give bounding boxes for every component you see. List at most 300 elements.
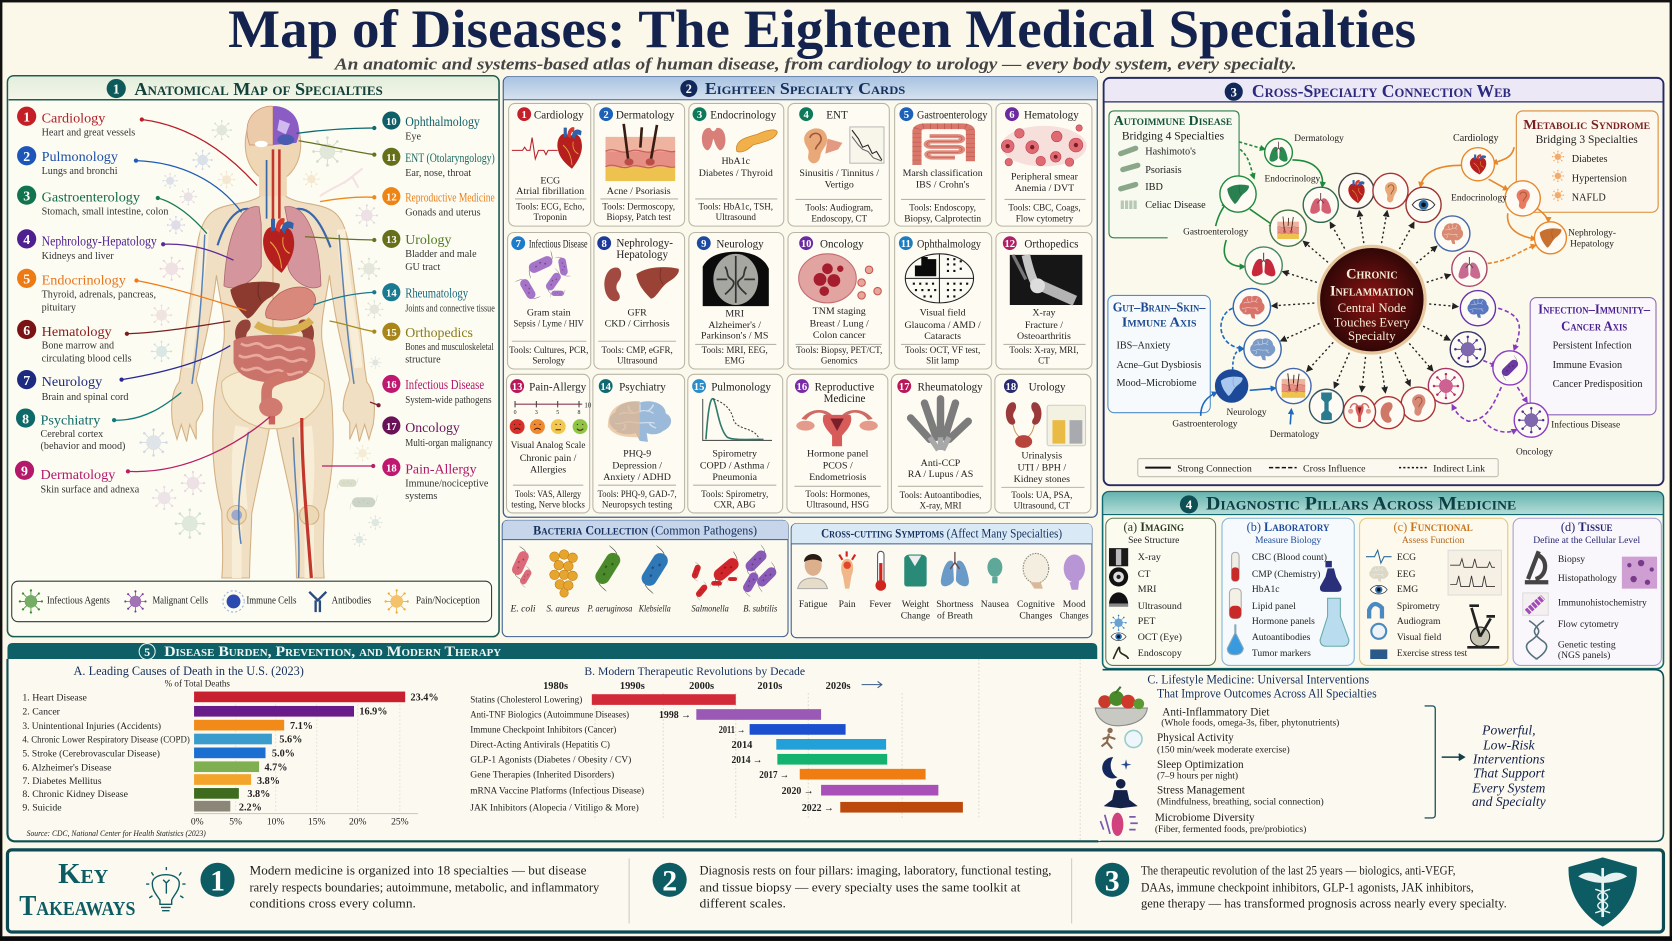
bacteria names: P. aeruginosa [587, 604, 633, 615]
specialty labels: left column: Dermatology [41, 467, 116, 483]
pillar: laboratory: Lipid panel [1252, 601, 1296, 612]
specialty labels: left column [15, 107, 168, 496]
card: Hematology: Anemia / DVT [1015, 183, 1074, 194]
pelvis and bones [222, 367, 324, 429]
specialty labels: right column: Pain-Allergy [405, 461, 477, 476]
card: Oncology [788, 232, 889, 369]
bacteria names [510, 604, 778, 615]
pillar: laboratory [1222, 518, 1354, 665]
gantt chart: therapeutic revolutions: mRNA Vaccine Platforms (Infectious Disease) [470, 785, 644, 795]
card: Reproductive Medicine: Medicine [824, 393, 866, 405]
pillar: laboratory: Tumor markers [1252, 648, 1311, 659]
bar chart: leading causes of death: 5.0% [272, 749, 295, 760]
card: Neurology: Parkinson's / MS [701, 331, 768, 342]
bar chart: leading causes of death: 3.8% [247, 789, 270, 800]
card: Reproductive Medicine: Endometriosis [809, 472, 866, 483]
heading: key takeaways: Takeaways [19, 890, 135, 922]
card: Neurology: Alzheimer's / [708, 320, 761, 331]
takeaway 3 [1095, 862, 1507, 910]
bacteria names: Klebsiella [638, 604, 671, 615]
cluster arrows: purple [1452, 308, 1527, 432]
pillar: tissue: Define at the Cellular Level [1533, 535, 1640, 546]
symptom icons [798, 551, 1085, 591]
web labels: Oncology [1516, 447, 1553, 457]
panel: cross-cutting symptoms [791, 524, 1092, 638]
bacteria names: E. coli [510, 604, 536, 615]
gantt chart: therapeutic revolutions: Direct-Acting Antivirals (Hepatitis C) [470, 740, 610, 750]
card: Pain-Allergy: 10 [584, 402, 592, 409]
web labels: Endocrinology [1265, 174, 1321, 184]
ring of specialty nodes [1216, 139, 1566, 437]
card: Reproductive Medicine: Hormone panel [807, 448, 869, 459]
card: Pulmonology: Spirometry [712, 448, 757, 459]
card: Nephrology-Hepatology: Ultrasound [617, 356, 658, 366]
gantt chart: therapeutic revolutions: B. Modern Therapeutic Revolutions by Decade [584, 665, 805, 678]
pillar: imaging: OCT (Eye) [1138, 632, 1182, 643]
callout: infection-immunity-cancer axis [1530, 298, 1656, 415]
gantt chart: therapeutic revolutions: 2020 → [782, 786, 814, 797]
takeaway 2: Diagnosis rests on four pillars: imaging, laboratory, functional testing, [700, 862, 1051, 877]
specialty labels: right column: systems [405, 491, 437, 502]
card: Cardiology: Atrial fibrillation [516, 186, 584, 197]
conclusion: low-risk interventions: Interventions [1472, 752, 1545, 767]
gantt chart: therapeutic revolutions: 2014 [732, 740, 753, 751]
web labels: Neurology [1226, 408, 1267, 418]
card: Pain-Allergy [507, 374, 592, 513]
specialty labels: left column: Cerebral cortex [41, 429, 103, 440]
card: Urology: Urology [1029, 381, 1066, 393]
symptom names: Changes [1060, 611, 1089, 622]
specialty labels: right column: 17 [386, 422, 397, 433]
specialty labels: right column: 12 [386, 193, 397, 204]
card: Pulmonology: CXR, ABG [714, 500, 756, 510]
card: Psychiatry: Depression / [612, 461, 662, 472]
card: Oncology: 10 [801, 239, 811, 250]
lifestyle interventions: (Mindfulness, breathing, social connection) [1157, 797, 1324, 808]
card: Psychiatry: Neuropsych testing [602, 500, 673, 510]
card: Pain-Allergy: 8 [578, 410, 581, 416]
pillar: tissue: Flow cytometry [1558, 619, 1619, 630]
lifestyle interventions: (7–9 hours per night) [1157, 770, 1238, 781]
callout: gut-brain-skin-immune axis: Acne–Gut Dysbiosis [1116, 360, 1201, 371]
card: Gastroenterology [895, 103, 992, 226]
card: Pain-Allergy: Visual Analog Scale [511, 440, 586, 451]
specialty labels: right column: 11 [386, 153, 396, 164]
bar chart: leading causes of death: 7.1% [290, 721, 313, 732]
card: Orthopedics: CT [1038, 356, 1050, 366]
callout: autoimmune disease: Autoimmune Disease [1114, 113, 1232, 128]
kidneys, pancreas [235, 319, 251, 348]
bar chart: leading causes of death: 16.9% [359, 706, 387, 717]
pillar: imaging: PET [1138, 616, 1155, 627]
symptom names: Change [901, 611, 930, 622]
card: Dermatology: Tools: Dermoscopy, [602, 202, 675, 212]
gantt chart: therapeutic revolutions: 2000s [689, 681, 714, 692]
card: ENT: 4 [803, 110, 809, 121]
card: Infectious Disease: 7 [516, 239, 522, 250]
card: Gastroenterology: Biopsy, Calprotectin [904, 213, 982, 223]
heading: connection web: Cross-Specialty Connection Web [1252, 81, 1511, 101]
card: Oncology: TNM staging [813, 306, 866, 317]
gantt chart: therapeutic revolutions: 2011 → [719, 725, 745, 736]
gantt chart: therapeutic revolutions: 2014 → [732, 755, 762, 766]
card: ENT: Endoscopy, CT [811, 213, 868, 223]
web labels: Endocrinology [1451, 194, 1507, 204]
panel 5: disease burden [7, 643, 1663, 841]
card: Neurology: EMG [725, 356, 745, 366]
legend: body map: Immune Cells [246, 596, 296, 607]
bacteria names: Salmonella [692, 604, 729, 615]
specialty labels: right column: Gonads and uterus [405, 207, 481, 218]
card: Neurology: Neurology [716, 238, 764, 250]
specialty labels: right column: Joints and connective tissue [405, 303, 495, 314]
subtitle: An anatomic and systems-based atlas of human disease, from cardiology to urology — every body system, every specialty. [334, 54, 1297, 73]
icon: microbiome [1100, 813, 1138, 836]
card: Hematology: Flow cytometry [1016, 213, 1074, 223]
card: Psychiatry: 14 [600, 382, 612, 393]
card: Infectious Disease: Sepsis / Lyme / HIV [514, 318, 585, 329]
callout: autoimmune disease [1109, 111, 1239, 238]
card: Cardiology: Troponin [534, 212, 567, 222]
pillar: imaging: X-ray [1138, 552, 1161, 563]
bar chart: leading causes of death: 3. Unintentional Injuries (Accidents) [22, 721, 161, 732]
specialty labels: right column: GU tract [405, 262, 441, 273]
takeaway 2: and tissue biopsy — every specialty uses the same toolkit at [700, 879, 1021, 894]
specialty labels: right column: Rheumatology [405, 286, 468, 301]
hub: chronic inflammation: Specialty [1348, 329, 1396, 343]
conclusion: low-risk interventions: Low-Risk [1482, 738, 1536, 753]
heading: connection web: 3 [1231, 86, 1237, 100]
card: Orthopedics: Osteoarthritis [1017, 331, 1071, 342]
card: Dermatology: Dermatology [616, 109, 675, 121]
lifestyle interventions [1155, 707, 1339, 835]
hub: chronic inflammation: Inflammation [1330, 283, 1414, 299]
card: Infectious Disease: Infectious Disease [529, 238, 588, 250]
legend: connection types [1138, 459, 1498, 477]
heading: disease burden: Disease Burden, Prevention, and Modern Therapy [164, 644, 502, 660]
heart organ [263, 218, 294, 273]
pillar: imaging: Endoscopy [1138, 648, 1182, 659]
gantt chart: therapeutic revolutions: 2022 → [802, 803, 834, 814]
takeaway 2: different scales. [700, 895, 786, 910]
title: Map of Diseases: The Eighteen Medical Specialties [228, 0, 1416, 59]
card: Rheumatology: X-ray, MRI [919, 501, 962, 511]
specialty labels: right column: Ophthalmology [405, 114, 480, 129]
specialty labels: left column: (behavior and mood) [41, 441, 125, 452]
lifestyle medicine: C. Lifestyle Medicine: Universal Interventions [1147, 673, 1369, 687]
specialty labels: right column: Urology [405, 232, 451, 247]
pillar: laboratory: CMP (Chemistry) [1252, 569, 1320, 580]
bar chart: leading causes of death: 20% [349, 816, 367, 827]
bar chart: leading causes of death: 4. Chronic Lower Respiratory Disease (COPD) [22, 735, 190, 746]
bar chart: leading causes of death: 5% [229, 816, 242, 827]
bar chart: leading causes of death: 4.7% [264, 762, 287, 773]
card: Infectious Disease: Tools: Cultures, PCR, [509, 345, 588, 355]
card: Rheumatology: 17 [899, 382, 910, 393]
specialty labels: left column: pituitary [42, 302, 77, 313]
panel 4: diagnostic pillars [1103, 492, 1663, 669]
card: Rheumatology [891, 374, 991, 513]
card: Rheumatology: Anti-CCP [921, 458, 961, 469]
card: Cardiology [509, 103, 591, 226]
callout: infection-immunity-cancer axis: Persistent Infection [1553, 341, 1632, 352]
card: Nephrology-Hepatology: Nephrology- [616, 237, 673, 249]
symptom names: Pain [839, 599, 856, 610]
pillar: laboratory: HbA1c [1252, 584, 1280, 595]
conclusion: low-risk interventions [1471, 723, 1547, 809]
web labels: Gastroenterology [1172, 420, 1238, 430]
specialty labels: left column: circulating blood cells [42, 354, 132, 365]
bacteria illustrations [506, 544, 783, 601]
card: Nephrology-Hepatology: CKD / Cirrhosis [605, 318, 670, 329]
card: Nephrology-Hepatology: 8 [602, 239, 607, 250]
heading: diagnostic pillars: 4 [1186, 498, 1193, 512]
specialty labels: left column: Hematology [42, 324, 113, 340]
pillar: functional [1360, 518, 1508, 665]
card: Psychiatry: Tools: PHQ-9, GAD-7, [598, 489, 677, 499]
card: Dermatology: Biopsy, Patch test [606, 212, 671, 222]
bar chart: leading causes of death: 15% [308, 816, 325, 827]
specialty labels: right column: Eye [405, 132, 421, 143]
card: Oncology: Colon cancer [813, 330, 866, 341]
liver, stomach [230, 282, 280, 318]
panel: cross-cutting symptoms: Cross-cutting Symptoms (Affect Many Specialties) [821, 526, 1062, 540]
symptom names: Weight [902, 599, 929, 610]
card: Gastroenterology: 5 [904, 110, 909, 121]
lifestyle interventions: (150 min/week moderate exercise) [1157, 744, 1290, 755]
pillar: functional: Visual field [1397, 632, 1441, 643]
spoke arrows [1272, 211, 1458, 392]
takeaway 2: 2 [662, 864, 677, 897]
gantt chart: therapeutic revolutions: Gene Therapies (Inherited Disorders) [470, 769, 614, 779]
card: Rheumatology: Rheumatology [917, 381, 983, 393]
pillar: imaging: (a) Imaging [1124, 520, 1184, 534]
specialty labels: right column: 10 [386, 117, 397, 128]
conclusion: low-risk interventions: and Specialty [1472, 794, 1547, 809]
card: Rheumatology: Tools: Autoantibodies, [900, 490, 981, 500]
gantt chart: therapeutic revolutions: JAK Inhibitors (Alopecia / Vitiligo & More) [470, 802, 639, 812]
icon: caduceus shield [1568, 857, 1637, 927]
panel 1: anatomical map [7, 76, 499, 637]
card: Ophthalmology: Visual field [920, 308, 966, 319]
card: Gastroenterology: Gastroenterology [917, 109, 988, 121]
specialty labels: right column: 18 [386, 463, 397, 474]
pillar: tissue: Genetic testing [1558, 639, 1616, 650]
icon: moon and star [1102, 757, 1131, 778]
card: Ophthalmology: Tools: OCT, VF test, [905, 345, 980, 355]
legend: connection types: Strong Connection [1177, 463, 1252, 474]
card: Dermatology [594, 103, 685, 226]
specialty labels: right column: Oncology [405, 420, 460, 435]
card: Pulmonology [688, 374, 783, 513]
bar chart: leading causes of death [22, 664, 439, 838]
gantt chart: therapeutic revolutions: GLP-1 Agonists (Diabetes / Obesity / CV) [470, 754, 631, 764]
card: Nephrology-Hepatology: GFR [627, 308, 647, 319]
card: Neurology: MRI [725, 309, 744, 320]
lifestyle interventions: (Whole foods, omega-3s, fiber, phytonutrients) [1161, 718, 1339, 729]
card: Hematology [996, 103, 1092, 226]
faint pathogens background [140, 120, 383, 547]
card: Hematology: Peripheral smear [1011, 172, 1079, 183]
pillar: functional: (c) Functional [1394, 520, 1473, 534]
card: Urology: 18 [1006, 382, 1016, 393]
specialty labels: left column: Heart and great vessels [42, 127, 135, 138]
web labels [1172, 133, 1620, 457]
brain [247, 106, 273, 145]
specialty labels: left column: Skin surface and adnexa [41, 485, 140, 496]
card: Dermatology: 2 [603, 110, 609, 121]
specialty labels: left column: Endocrinology [42, 273, 127, 289]
gantt chart: therapeutic revolutions: Immune Checkpoint Inhibitors (Cancer) [470, 725, 616, 735]
card: Urology: Urinalysis [1021, 451, 1062, 462]
specialty labels: right column: structure [405, 355, 441, 366]
specialty labels: right column: 16 [386, 380, 397, 391]
card: Cardiology: 1 [522, 110, 527, 121]
specialty labels: left column: 8 [22, 411, 29, 426]
specialty labels: left column: Pulmonology [42, 149, 119, 165]
card: Neurology [689, 232, 784, 369]
card: Reproductive Medicine [787, 374, 888, 513]
card: Oncology: Breast / Lung / [810, 318, 869, 329]
specialty labels: right column: Orthopedics [405, 325, 473, 340]
pillar: laboratory: Hormone panels [1252, 616, 1315, 627]
card: Pulmonology: Pulmonology [711, 381, 771, 393]
gantt chart: therapeutic revolutions: 1990s [620, 681, 645, 692]
card: Infectious Disease [508, 232, 591, 369]
intestines [234, 335, 315, 382]
card: Pain-Allergy: 0 [514, 410, 517, 416]
takeaway 3: 3 [1105, 864, 1120, 897]
pillar: tissue: Immunohistochemistry [1558, 598, 1647, 609]
card: Psychiatry: PHQ-9 [623, 448, 651, 459]
card: ENT: ENT [826, 109, 848, 121]
pillar: functional: Exercise stress test [1397, 648, 1468, 659]
web labels: Dermatology [1270, 430, 1320, 440]
specialty labels: right column: 15 [386, 328, 397, 339]
card: Pain-Allergy: 13 [512, 382, 522, 393]
card: Orthopedics [996, 232, 1092, 369]
bar chart: leading causes of death: 5. Stroke (Cerebrovascular Disease) [22, 749, 160, 760]
callout: metabolic syndrome: Metabolic Syndrome [1523, 117, 1650, 132]
specialty labels: right column: Immune/nociceptive [405, 478, 489, 489]
card: Ophthalmology: Slit lamp [926, 356, 960, 366]
specialty labels: left column: Brain and spinal cord [42, 392, 128, 403]
bar chart: leading causes of death: 8. Chronic Kidney Disease [22, 789, 129, 800]
symptom names: Changes [1019, 611, 1053, 622]
callout: metabolic syndrome [1516, 111, 1658, 212]
callout: autoimmune disease: Celiac Disease [1145, 200, 1206, 211]
specialty labels: left column: 1 [23, 110, 30, 125]
legend: body map: Infectious Agents [47, 596, 110, 607]
card: Endocrinology: Ultrasound [716, 212, 756, 222]
web labels: Hepatology [1570, 239, 1614, 249]
legend: connection types: Indirect Link [1433, 463, 1485, 474]
bar chart: leading causes of death: 10% [267, 816, 284, 827]
card: Oncology: Genomics [821, 356, 858, 366]
card: Pain-Allergy: Pain-Allergy [529, 381, 587, 393]
specialty labels: left column: Gastroenterology [42, 190, 141, 206]
arrow [1442, 754, 1464, 760]
specialty labels: left column: Stomach, small intestine, colon [42, 206, 168, 217]
vessels [302, 418, 311, 578]
takeaway 3: The therapeutic revolution of the last 25 years — biologics, anti-VEGF, [1141, 862, 1456, 877]
lifestyle interventions: Stress Management [1157, 784, 1246, 796]
card: Urology: Ultrasound, CT [1014, 501, 1070, 511]
card: Pain-Allergy: testing, Nerve blocks [511, 500, 585, 510]
cluster arrows: blue [1201, 308, 1291, 424]
web labels: Cardiology [1453, 133, 1500, 144]
legend: body map: Pain/Nociception [416, 596, 481, 607]
card: Reproductive Medicine: Ultrasound, HSG [806, 500, 870, 510]
specialty labels: right column: Ear, nose, throat [405, 168, 471, 179]
card: ENT [788, 103, 889, 226]
cluster arrows: orange [1420, 147, 1548, 263]
icon: light bulb [146, 867, 186, 911]
card: Dermatology: Acne / Psoriasis [607, 186, 671, 197]
card: Infectious Disease: Serology [532, 356, 566, 366]
card: Cardiology: Cardiology [534, 109, 584, 121]
pillar: tissue [1513, 518, 1661, 665]
specialty labels: left column: Neurology [42, 374, 103, 390]
takeaway 1: Modern medicine is organized into 18 specialties — but disease [250, 862, 587, 877]
pillar: functional: Spirometry [1397, 601, 1440, 612]
lifestyle medicine: That Improve Outcomes Across All Specialties [1157, 686, 1377, 700]
takeaway 1: conditions cross every column. [250, 895, 416, 910]
card: Orthopedics: Tools: X-ray, MRI, [1009, 345, 1079, 355]
heading: anatomical map: 1 [113, 81, 120, 96]
specialty labels: left column: Lungs and bronchi [42, 166, 118, 177]
card: Rheumatology: RA / Lupus / AS [908, 469, 973, 480]
panel 3: connection web [1104, 78, 1663, 485]
gantt chart: therapeutic revolutions: 1998 → [659, 710, 691, 721]
web labels: Dermatology [1294, 134, 1344, 144]
card: Endocrinology: Diabetes / Thyroid [699, 168, 773, 179]
hub: chronic inflammation [1319, 246, 1425, 353]
card: Urology: Tools: UA, PSA, [1011, 490, 1072, 500]
card: Ophthalmology: 11 [901, 239, 911, 250]
bar chart: leading causes of death: 9. Suicide [22, 802, 62, 813]
callout: metabolic syndrome: NAFLD [1572, 193, 1606, 204]
card: Urology [995, 374, 1091, 513]
card: Pain-Allergy: Chronic pain / [520, 453, 577, 464]
card: Endocrinology: HbA1c [721, 156, 751, 167]
bar chart: leading causes of death: 2. Cancer [22, 706, 61, 717]
symptom names: Fever [869, 599, 892, 610]
bar chart: leading causes of death: 25% [391, 816, 409, 827]
card: Urology: UTI / BPH / [1017, 462, 1066, 473]
card: Cardiology: Tools: ECG, Echo, [516, 202, 584, 212]
card: Ophthalmology: Cataracts [924, 331, 961, 342]
heading: key takeaways: Key [58, 858, 109, 890]
card: Ophthalmology: Glaucoma / AMD / [905, 320, 981, 331]
pillar: imaging: Ultrasound [1138, 601, 1182, 612]
callout: gut-brain-skin-immune axis: Immune Axis [1122, 314, 1196, 329]
callout: autoimmune disease: Bridging 4 Specialties [1122, 131, 1225, 143]
card: Orthopedics: 12 [1004, 239, 1015, 250]
specialty labels: left column: Nephrology-Hepatology [42, 233, 158, 249]
card: Infectious Disease: Gram stain [527, 308, 571, 319]
card: Pain-Allergy: Allergies [530, 464, 566, 475]
callout: gut-brain-skin-immune axis: Mood–Microbiome [1116, 378, 1197, 389]
legend: body map: Malignant Cells [152, 596, 208, 607]
heading: specialty cards: Eighteen Specialty Cards [705, 79, 906, 98]
symptom names: of Breath [937, 611, 973, 622]
panel: bacteria collection [502, 520, 788, 637]
legend: connection types: Cross Influence [1303, 463, 1366, 474]
card: Nephrology-Hepatology: Tools: CMP, eGFR, [601, 345, 673, 355]
card: Oncology: Tools: Biopsy, PET/CT, [796, 345, 882, 355]
bar chart: leading causes of death: 1. Heart Disease [22, 693, 88, 704]
